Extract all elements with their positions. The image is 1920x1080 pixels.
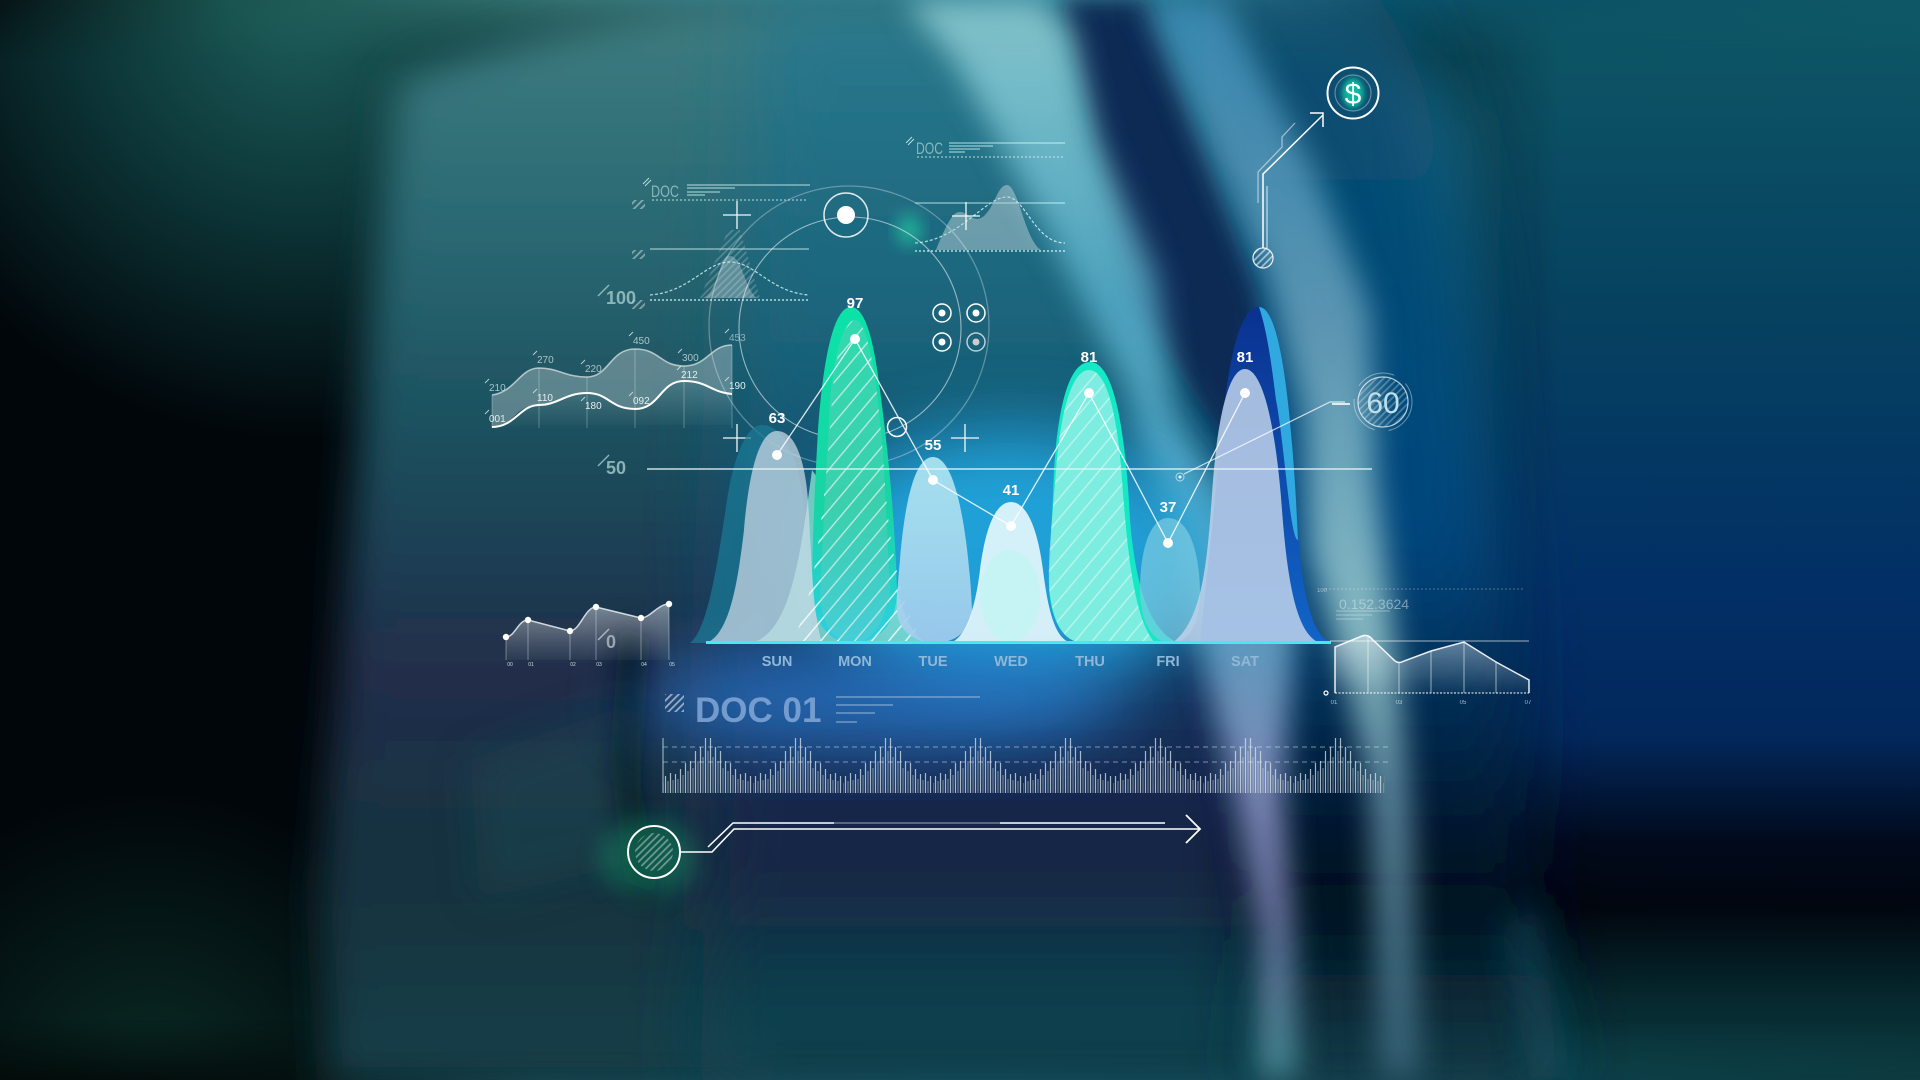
faint right fold	[1500, 900, 1572, 1078]
title: DOC 01	[665, 691, 980, 730]
callout: 60 gauge connector and badge	[1176, 373, 1412, 481]
value labels: 97	[847, 295, 863, 312]
day labels: TUE	[918, 654, 948, 670]
MON solid green oval	[812, 307, 897, 643]
panel: right area chart: 05	[1460, 700, 1467, 706]
value readout: 0.152.3624	[1339, 596, 1409, 612]
shirt streak A	[905, 0, 1298, 1078]
day labels: THU	[1075, 654, 1105, 670]
day labels	[762, 654, 1259, 670]
waveform chart	[663, 733, 1390, 793]
day labels: SAT	[1231, 654, 1259, 670]
icon: dollar badge with arrow: $	[1345, 78, 1362, 111]
THU back bell	[1049, 362, 1178, 643]
axis labels 100 and 50: 50	[606, 458, 626, 478]
panel: left area chart: 450	[633, 336, 650, 347]
day labels: SUN	[762, 654, 792, 670]
panel: right area chart	[1317, 588, 1532, 706]
panel: top-left DOC mini chart	[632, 178, 810, 309]
THU hatched bell	[1049, 370, 1155, 643]
axis labels 100 and 50: 100	[606, 288, 636, 308]
arm gap shadow	[610, 620, 660, 900]
panel: left area chart: 300	[682, 353, 699, 364]
arm	[318, 0, 950, 1080]
MON hatched overlay	[790, 320, 925, 643]
panel: left area chart: 210	[489, 383, 506, 394]
axis labels 100 and 50	[598, 285, 636, 478]
panel: bottom-left mini line chart: 02	[570, 662, 576, 668]
DOC label: DOC	[651, 182, 679, 201]
DOC label: DOC	[916, 139, 943, 158]
value labels: 81	[1237, 349, 1253, 366]
panel: left area chart: 110	[537, 393, 553, 404]
panel: bottom-left mini line chart: 01	[528, 662, 534, 668]
value labels: 63	[769, 410, 785, 427]
TUE oval bell	[897, 457, 972, 643]
icon: target dot	[824, 193, 868, 237]
tie	[1060, 0, 1260, 480]
SAT back bell	[1200, 307, 1332, 643]
SUN front bell	[706, 431, 822, 643]
small ring marker on radar	[888, 418, 906, 436]
panel: left area chart: 220	[585, 364, 602, 375]
trend line with points	[772, 334, 1250, 548]
panel: left area chart: 453	[729, 333, 746, 344]
right lapel	[1200, 0, 1560, 1080]
panel: right area chart: 01	[1331, 700, 1338, 706]
sleeve fold highlight	[470, 700, 640, 900]
long arrow with hatched circle	[628, 815, 1200, 878]
panel: bottom-left mini line chart: 03	[596, 662, 602, 668]
panel: left area chart: 190	[729, 381, 746, 392]
chart glow backdrop	[600, 430, 1210, 896]
torso	[700, 0, 1490, 1080]
panel: bottom-left mini line chart: 05	[669, 662, 675, 668]
value labels: 41	[1003, 482, 1019, 499]
day labels: FRI	[1156, 654, 1180, 670]
panel: left area chart: 180	[585, 401, 602, 412]
panel: right area chart: 03	[1396, 700, 1403, 706]
bar chart: bell-shaped weekly peaks	[647, 295, 1372, 670]
panel: top-right DOC mini chart	[906, 137, 1065, 251]
shirt streak B	[1144, 0, 1420, 1078]
icon: crosshair plus signs	[723, 201, 980, 452]
panel: bottom-left mini line chart: 00	[507, 662, 513, 668]
callout: 60 gauge connector and badge: 60	[1366, 387, 1400, 420]
MON wide light base	[752, 470, 927, 643]
icon: four small targets	[933, 304, 985, 351]
SUN back bell	[690, 425, 812, 643]
panel: left area chart: 001	[489, 414, 506, 425]
panel: right area chart: 100	[1317, 588, 1328, 594]
baseline	[706, 641, 1331, 644]
icon: dollar badge with arrow	[1253, 68, 1378, 268]
day labels: WED	[994, 654, 1028, 670]
value labels: 81	[1081, 349, 1097, 366]
value labels: 55	[925, 437, 941, 454]
panel: left area chart: 212	[681, 370, 698, 381]
day labels: MON	[838, 654, 872, 670]
SAT front bell	[1172, 369, 1320, 643]
panel: right area chart: 07	[1525, 700, 1532, 706]
panel: left area chart	[485, 329, 746, 428]
WED bell	[949, 502, 1072, 643]
panel: bottom-left mini line chart	[503, 601, 675, 668]
panel: left area chart: 092	[633, 396, 650, 407]
glow: green spot	[896, 214, 922, 246]
axis label 0: 0	[606, 632, 616, 652]
title: DOC 01: DOC 01	[695, 691, 821, 730]
panel: left area chart: 270	[537, 355, 554, 366]
panel: bottom-left mini line chart: 04	[641, 662, 647, 668]
value labels: 37	[1160, 499, 1176, 516]
horizontal 50 line	[647, 468, 1372, 470]
radar rings and crosshairs	[709, 186, 989, 466]
FRI bell	[1140, 518, 1200, 643]
value labels	[769, 295, 1253, 516]
